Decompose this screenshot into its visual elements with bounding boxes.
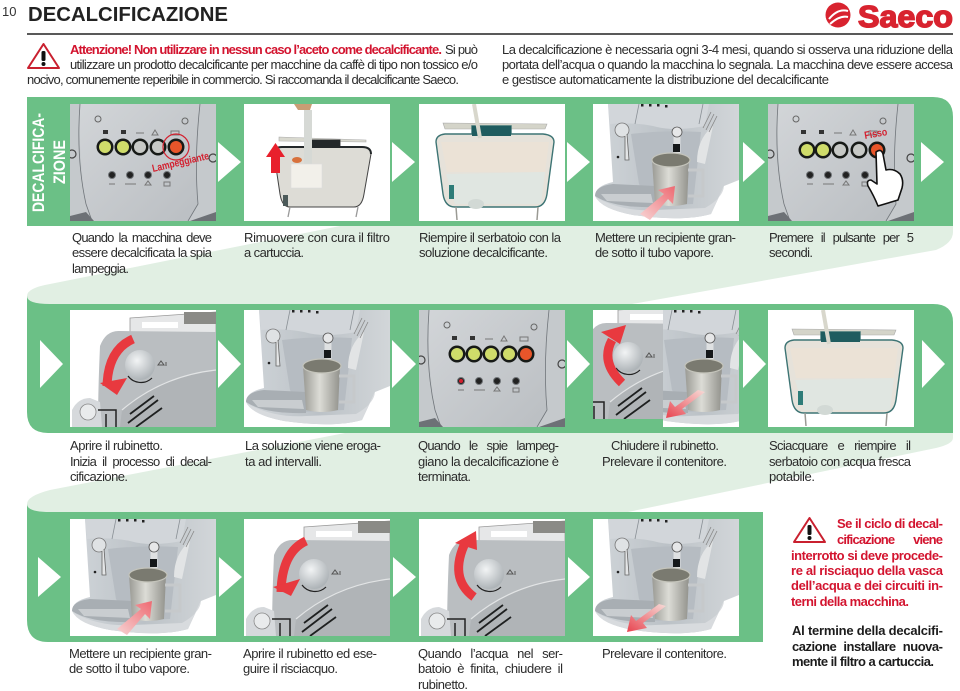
sidebar label: DECALCIFICA-: [29, 113, 48, 212]
band 1 background: [27, 97, 953, 226]
caption 10: [769, 438, 912, 484]
arrow: [392, 340, 416, 388]
caption 8: terminata.: [418, 469, 471, 484]
caption 11: [69, 646, 212, 676]
arrow: [567, 142, 590, 182]
wedge 2: [27, 433, 953, 512]
note: reinstall filter: Al termine della decalcifi-: [792, 623, 943, 638]
caption 14: Prelevare il contenitore.: [602, 646, 727, 661]
wedge 1: [27, 226, 953, 304]
step 2 photo: filter removal: [244, 104, 390, 221]
arrow: [218, 142, 241, 182]
step 13 photo: close tap: [419, 519, 565, 636]
arrow: [567, 340, 590, 388]
caption 12: [243, 646, 377, 676]
caption 3: [419, 230, 562, 260]
step 6 photo: open tap: [70, 310, 216, 427]
caption 3: Riempire il serbatoio con la: [419, 230, 562, 245]
warning text: utilizzare un prodotto decalcificante per macchine da caffè di tipo non tossico e/o: [70, 57, 478, 72]
step 7 photo: machine dispensing: [244, 310, 390, 427]
arrow: [921, 142, 944, 182]
warning text: interrupted cycle: terni della macchina.: [791, 594, 909, 609]
caption 6: cificazione.: [70, 469, 128, 484]
step 5 photo: press button: [766, 104, 915, 221]
caption 4: Mettere un recipiente gran-: [595, 230, 736, 245]
caption 13: batoio è finita, chiudere il: [418, 661, 563, 676]
caption 9: [602, 438, 727, 469]
warning icon: [28, 44, 59, 68]
caption 11: de sotto il tubo vapore.: [69, 661, 190, 676]
caption 6: [70, 438, 212, 484]
caption 5: secondi.: [769, 245, 813, 260]
arrow: [38, 557, 61, 597]
note: reinstall filter: [792, 623, 943, 669]
warning text: [27, 42, 478, 87]
caption 5: Premere il pulsante per 5: [769, 230, 914, 245]
caption 13: Quando l’acqua nel ser-: [418, 646, 563, 661]
caption 7: ta ad intervalli.: [245, 454, 322, 469]
warning text: interrupted cycle: interrotto si deve procede-: [791, 548, 943, 563]
warning text: nocivo, comunemente reperibile in commercio. Si raccomanda il decalcificante Saeco.: [27, 72, 459, 87]
step 1 photo: control panel blinking: Lampeggiante: [151, 150, 210, 175]
warning text: interrupted cycle: re al risciaquo della vasca: [791, 563, 944, 578]
caption 7: La soluzione viene eroga-: [245, 438, 381, 453]
intro text: e gestisce automaticamente la distribuzione del decalcificante: [502, 72, 829, 87]
caption 3: soluzione decalcificante.: [419, 245, 548, 260]
warning text: interrupted cycle: dell’acqua e dei circuiti in-: [791, 578, 943, 593]
note: reinstall filter: mente il filtro a cartuccia.: [792, 654, 934, 669]
sidebar label: ZIONE: [50, 140, 69, 184]
caption 11: Mettere un recipiente gran-: [69, 646, 212, 661]
caption 1: lampeggia.: [72, 261, 129, 276]
arrow: [392, 142, 415, 182]
step 5 photo: press button: Fisso: [863, 126, 888, 142]
caption 9: Chiudere il rubinetto.: [611, 438, 719, 453]
warning text: interrupted cycle: Se il ciclo di decal-: [837, 516, 943, 531]
caption 1: Quando la macchina deve: [72, 230, 212, 245]
arrow: [568, 557, 590, 597]
caption 4: [595, 230, 736, 260]
step 8 photo: lights blinking: [417, 310, 566, 427]
logo: Saeco: Saeco: [858, 0, 953, 34]
caption 7: [245, 438, 381, 469]
arrow: [219, 557, 242, 597]
caption 12: Aprire il rubinetto ed ese-: [243, 646, 377, 661]
note: reinstall filter: cazione installare nuova-: [792, 639, 943, 654]
icon: pressing hand: [867, 150, 903, 206]
warning text: interrupted cycle: [791, 516, 944, 609]
caption 2: a cartuccia.: [244, 245, 304, 260]
intro text: La decalcificazione è necessaria ogni 3-4 mesi, quando si osserva una riduzione della: [502, 42, 954, 57]
arrow: [218, 340, 241, 388]
caption 13: [418, 646, 563, 691]
caption 6: Aprire il rubinetto.: [70, 438, 163, 453]
caption 2: [244, 230, 390, 260]
caption 10: Sciacquare e riempire il: [769, 438, 911, 453]
caption 4: de sotto il tubo vapore.: [595, 245, 714, 260]
warning text: Si può: [445, 42, 478, 57]
title: DECALCIFICAZIONE: [28, 4, 228, 26]
caption 5: [769, 230, 914, 260]
caption 1: essere decalcificata la spia: [72, 245, 213, 260]
caption 8: giano la decalcificazione è: [418, 454, 559, 469]
arrow: [40, 340, 63, 388]
caption 8: Quando le spie lampeg-: [418, 438, 559, 453]
step 12 photo: open tap and rinse: [244, 519, 390, 636]
caption 2: Rimuovere con cura il filtro: [244, 230, 390, 245]
caption 12: guire il risciacquo.: [243, 661, 338, 676]
arrow: [922, 340, 945, 388]
step 3 photo: tank filling: [419, 104, 565, 221]
band 2 background: [27, 296, 953, 433]
arrow: [743, 142, 765, 182]
step 9 photo: close tap and remove container: [558, 302, 772, 427]
step 11 photo: container under steam tube: [70, 519, 216, 636]
caption 1: [72, 230, 213, 276]
step 10 photo: rinse tank: [768, 310, 914, 427]
warning text: Attenzione! Non utilizzare in nessun caso l’aceto come decalcificante.: [70, 42, 442, 57]
sidebar label: [29, 113, 69, 212]
caption 8: [418, 438, 559, 484]
page number: 10: [2, 4, 16, 19]
step 4 photo: machine with container: [593, 104, 739, 221]
caption 9: Prelevare il contenitore.: [602, 454, 727, 469]
step 14 photo: remove container: [593, 519, 739, 636]
arrow: [393, 557, 416, 597]
intro text: [502, 42, 954, 87]
warning text: interrupted cycle: cificazione viene: [837, 532, 943, 547]
caption 10: serbatoio con acqua fresca: [769, 454, 912, 469]
arrow: [743, 340, 766, 388]
caption 10: potabile.: [769, 469, 815, 484]
step 1 photo: control panel blinking: [68, 104, 217, 221]
band 3 background: [27, 504, 763, 642]
intro text: portata dell’acqua o quando la macchina lo segnala. La macchina deve essere accesa: [502, 57, 954, 72]
caption 6: Inizia il processo di decal-: [70, 454, 212, 469]
warning icon: interrupted cycle: [794, 518, 825, 542]
